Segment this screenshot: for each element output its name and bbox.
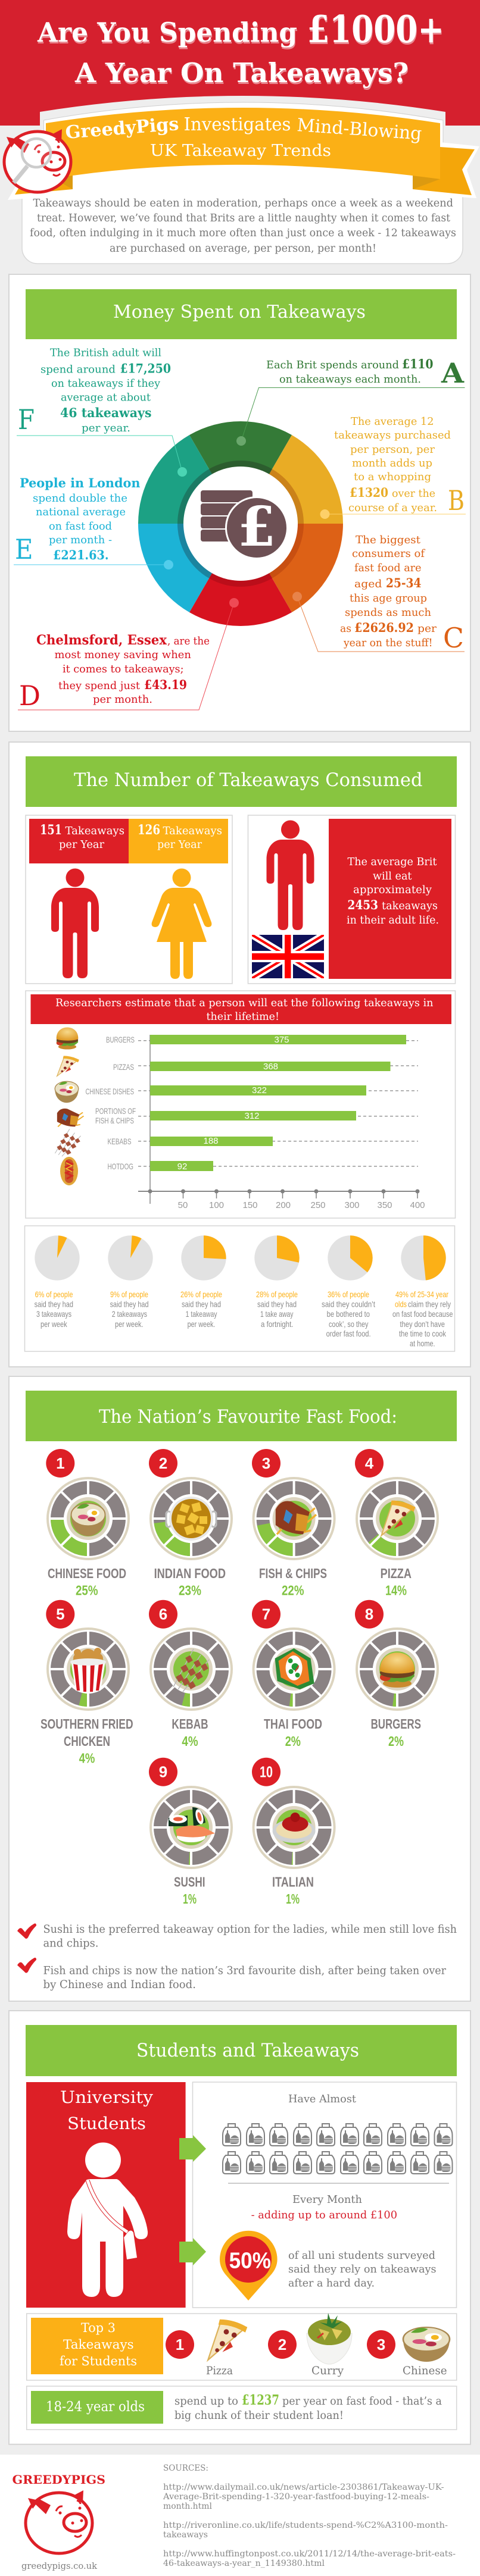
panel: monthly takeaways [193,2082,456,2308]
callout: C: year on the stuff! [343,637,432,649]
item 3: fish and chips: FISH & CHIPS [259,1566,327,1581]
item 10: italian [252,1758,335,1907]
title: A Year On Takeaways? [74,57,409,89]
panel: monthly takeaways: Have Almost [288,2093,357,2105]
item 9: sushi [149,1758,232,1907]
pie captions: said they had [257,1300,297,1309]
icon row: takeaway bags [223,2124,453,2174]
donut chart [138,421,343,626]
item 5: southern fried chicken: CHICKEN [64,1733,110,1749]
pie captions: a fortnight. [261,1319,293,1329]
item 8: burgers [355,1600,438,1749]
category labels [86,1035,136,1171]
sources: http://riveronline.co.uk/life/students-spend-%C2%A3100-month- [163,2521,448,2530]
chart heading: Researchers estimate that a person will eat the following takeaways in [55,997,434,1009]
pie captions: the time to cook [399,1329,447,1338]
university students panel: Students [67,2114,146,2133]
logo: greedypigs.co.uk [21,2561,98,2571]
item 3: fish and chips: 3 [262,1454,270,1472]
intro text: treat. However, we’ve found that Brits are a little naughty when it comes to fast [37,212,450,224]
axis labels: 400 [410,1200,425,1210]
item 1: chinese food: CHINESE FOOD [48,1566,126,1581]
pie captions: said they couldn’t [322,1300,375,1309]
callout: C: 25-34 [386,575,422,590]
stat: women [129,819,228,863]
callout: E [14,475,173,569]
callout: C: The biggest [356,534,421,546]
callout: B: The average 12 [351,415,434,428]
category labels: PIZZAS [113,1062,134,1072]
fact: sushi preference: Sushi is the preferred takeaway option for the ladies, while men still love fish [43,1923,457,1936]
item 9: sushi: SUSHI [174,1874,205,1890]
fact: fish and chips ranking [17,1958,447,1991]
item 4: pizza: PIZZA [381,1566,412,1581]
callout: D: D [19,680,40,712]
item 5: southern fried chicken: 4% [79,1751,95,1766]
stat: men: 151 [40,822,62,838]
callout: B: £1320 [350,485,388,500]
fact: fish and chips ranking: Fish and chips is now the nation’s 3rd favourite dish, after being taken over [43,1964,447,1977]
item 10: italian: 10 [260,1763,273,1781]
category labels: HOTDOG [107,1162,133,1171]
fact: fish and chips ranking: by Chinese and Indian food. [43,1978,196,1991]
sources: takeaways [163,2530,208,2540]
pie captions: 6% of people [35,1289,73,1299]
arrow: to 50 percent [179,2238,206,2265]
callout: F: per year. [82,422,130,434]
sources: month.html [163,2502,213,2511]
item 6: kebab [149,1600,232,1749]
callout: F: on takeaways if they [51,377,161,390]
panel: average brit [248,815,455,984]
sources: SOURCES: [163,2464,208,2473]
callout: D: they spend just [58,680,141,692]
pie captions: 1 takeaway [186,1309,217,1319]
item 9: sushi: 1% [183,1891,197,1907]
panel: monthly takeaways: after a hard day. [288,2277,375,2290]
callout: C: consumers of [352,547,425,560]
pie captions: 28% of people [256,1289,298,1299]
item 8: burgers: 2% [388,1733,404,1749]
icon: pizza [57,1056,79,1076]
stat: lifetime takeaways: 2453 [348,897,378,912]
item 5: southern fried chicken: 5 [56,1605,65,1623]
icon: kebabs [55,1129,81,1156]
icon: man [267,820,314,930]
callout: A [236,356,465,446]
stat: women: 126 [138,822,160,838]
icon: pound coins: £ [238,494,276,559]
choice 2: curry [268,2313,352,2377]
axis labels: 200 [276,1200,291,1210]
callout: C: £2626.92 [354,620,414,635]
panel: monthly takeaways: of all uni students surveyed [288,2249,435,2262]
callout: B: month adds up [352,457,432,469]
logo: GREEDYPIGS [12,2472,105,2487]
icon: chinese bowl [55,1081,79,1103]
panel: 18-24 year olds: big chunk of their student loan! [174,2409,344,2422]
pie captions: 3 takeaways [36,1309,71,1319]
pie captions: 9% of people [110,1289,148,1299]
callout: F: 46 takeaways [60,405,151,420]
pie captions: said they had [110,1300,149,1309]
callout: B: takeaways purchased [334,429,451,442]
callout: E: per month - [49,534,112,546]
axis labels: 150 [242,1200,258,1210]
sources: Average-Brit-spending-1-320-year-fastfood-buying-12-meals- [163,2492,429,2502]
choice 1: pizza [166,2320,247,2377]
callout: E: on fast food [49,520,112,533]
item 7: thai food: 2% [285,1733,301,1749]
callout: D: Chelmsford, Essex [36,633,167,648]
item 9: sushi: 9 [159,1763,167,1781]
callout: E: £221.63. [53,547,108,562]
choice 3: chinese: Chinese [403,2364,447,2377]
ribbon heading [64,114,422,160]
pie captions [35,1289,453,1348]
axis labels: 350 [377,1200,392,1210]
callout: B: per person, per [350,443,435,456]
callout: F: F [18,403,35,436]
item 10: italian: 1% [286,1891,300,1907]
panel: students and takeaways [9,2011,470,2444]
item 4: pizza [355,1449,438,1598]
pie captions: on fast food because [392,1309,453,1319]
heading: favourite food: The Nation’s Favourite Fast Food: [99,1406,397,1428]
item 2: indian food [149,1449,232,1598]
choice 2: curry: Curry [311,2364,344,2377]
bars [150,1035,406,1171]
axis ticks [148,1190,419,1198]
item 6: kebab: KEBAB [172,1716,208,1732]
item 2: indian food: 2 [159,1454,167,1472]
item 6: kebab: 6 [159,1605,167,1623]
category labels: PORTIONS OF [95,1106,136,1116]
panel: 18-24 year olds: spend up to [174,2395,238,2408]
pie captions: they don’t have [400,1319,445,1329]
callout: D: per month. [93,693,152,706]
panel: 18-24 year olds: £1237 [242,2392,279,2408]
ribbon [46,108,440,179]
callout: F [17,346,187,477]
callout: C: spends as much [345,606,431,619]
item 7: thai food [252,1600,335,1749]
header [0,0,480,126]
bar values: 322 [252,1085,267,1095]
callout: C: C [443,622,464,654]
pie captions: order fast food. [326,1329,371,1338]
label: top 3: for Students [60,2354,137,2368]
item 4: pizza: 4 [365,1454,374,1472]
callout: B: to a whopping [354,471,431,483]
panel: number of takeaways consumed [9,742,470,1367]
callout: F: The British adult will [50,346,161,359]
callout: C: fast food are [354,562,422,574]
choice 1: pizza: Pizza [206,2364,233,2377]
icon: pig with magnifier [4,129,71,192]
bar values: 312 [244,1111,260,1121]
item 8: burgers: 8 [365,1605,373,1623]
label: top 3: Takeaways [63,2337,134,2352]
intro text: are purchased on average, per person, per month! [110,243,376,255]
axis labels: 100 [209,1200,224,1210]
panel: monthly takeaways: - adding up to around £100 [251,2209,397,2221]
callout: A: on takeaways each month. [279,373,421,386]
item 2: indian food: INDIAN FOOD [154,1566,226,1581]
panel: 18-24 year olds: 18-24 year olds [46,2399,145,2415]
callout: D: it comes to takeaways; [63,663,183,675]
label: top 3 [31,2318,163,2374]
callout: F: £17,250 [120,361,171,376]
pie captions: per week. [188,1319,215,1329]
bar values: 368 [263,1062,278,1072]
callout: C: as [340,622,351,635]
item 8: burgers: BURGERS [371,1716,421,1732]
item 6: kebab: 4% [182,1733,198,1749]
stat: lifetime takeaways [329,819,451,979]
callout: A: Each Brit spends around [266,359,399,371]
sources: 46-takeaways-a-year_n_1149380.html [163,2559,325,2568]
pie captions: be bothered to [327,1309,370,1319]
item 1: chinese food: 25% [76,1583,98,1598]
bar chart [86,1035,425,1210]
pie captions: said they had [35,1300,73,1309]
pie captions: 49% of 25-34 year [395,1289,448,1299]
icon: man [51,869,99,978]
stat: lifetime takeaways: in their adult life. [347,915,439,927]
callout: A: A [441,357,465,389]
university students panel: University [60,2087,153,2107]
bar values: 188 [203,1136,219,1146]
choice 3: chinese [367,2327,450,2377]
icon: union jack [252,935,324,978]
callout: B [320,415,466,519]
item 1: chinese food [46,1449,129,1598]
item 1: chinese food: 1 [56,1454,65,1472]
item 3: fish and chips [252,1449,335,1598]
stat: women: per Year [157,839,202,851]
callout: B: course of a year. [348,502,437,514]
callout: E: People in London [20,475,141,490]
item 10: italian: ITALIAN [272,1874,314,1890]
stat: lifetime takeaways: The average Brit [348,856,437,868]
panel: lifetime bar chart [26,991,455,1218]
title: £1000+ [307,7,444,51]
callout: E: national average [36,506,126,518]
callout: F: average at about [61,392,151,403]
heading: students [26,2025,457,2076]
heading: favourite food [26,1391,457,1441]
pie captions: claim they rely [408,1300,451,1309]
stat: lifetime takeaways: takeaways [382,900,438,912]
callout: F: spend around [40,363,116,376]
heading: money spent [26,289,457,339]
panel: 18-24 year olds [27,2386,457,2430]
panel: money spent on takeaways [9,274,470,731]
callout: C [292,534,465,654]
ribbon heading: GreedyPigs [64,114,180,143]
choice 2: curry: 2 [278,2336,286,2353]
intro text: food, often indulging in it much more often than just once a week - 12 takeaways [30,227,456,239]
stat: men [29,819,129,863]
intro banner and text card [4,96,479,264]
icon: hotdog [60,1157,78,1185]
panel: frequency pies [25,1226,455,1351]
panel: 18-24 year olds: per year on fast food - that’s a [282,2395,442,2408]
axis labels: 300 [344,1200,360,1210]
category labels: BURGERS [106,1035,135,1044]
fact: sushi preference [17,1923,457,1950]
item 2: indian food: 23% [179,1583,201,1598]
title: Are You Spending [37,17,297,48]
ribbon heading: Investigates [183,114,291,135]
ribbon tails [15,147,475,195]
pie captions: 36% of people [328,1289,369,1299]
sources: http://www.dailymail.co.uk/news/article-2303861/Takeaway-UK- [163,2483,444,2492]
callout: D [18,598,239,712]
icon: burger [57,1028,78,1050]
logo [12,2472,105,2571]
icon: pound coins [201,490,288,559]
callout: C: aged [354,578,382,590]
footer [0,2455,480,2576]
chart heading: their lifetime! [206,1010,279,1023]
item 5: southern fried chicken: SOUTHERN FRIED [40,1716,133,1732]
sources: http://www.huffingtonpost.co.uk/2011/12/14/the-average-brit-eats- [163,2549,456,2559]
arrow: to bags [179,2135,206,2162]
ribbon heading: UK Takeaway Trends [150,142,331,160]
callout: C: this age group [350,592,427,605]
stat: women: Takeaways [163,825,222,837]
sources [163,2464,456,2568]
stat: men: per Year [59,839,105,851]
pie captions: per week [40,1319,67,1329]
heading: students: Students and Takeaways [136,2040,359,2061]
item 4: pizza: 14% [385,1583,407,1598]
item 7: thai food: THAI FOOD [264,1716,322,1732]
callout: E: spend double the [33,492,127,505]
pie captions: 26% of people [180,1289,222,1299]
pie captions: olds [395,1300,407,1309]
heading: money spent: Money Spent on Takeaways [113,302,366,323]
category labels: KEBABS [107,1137,131,1146]
callout: E: E [15,533,33,565]
heading: number consumed: The Number of Takeaways Consumed [74,769,423,791]
icon: 50 percent pin: 50% [229,2249,271,2274]
pie captions: 1 take away [260,1309,293,1319]
choice 1: pizza: 1 [176,2336,184,2353]
bar values: 375 [274,1035,289,1045]
intro text: Takeaways should be eaten in moderation, perhaps once a week as a weekend [33,198,453,209]
chart heading [31,994,451,1024]
panel: monthly takeaways: said they rely on takeaways [288,2263,437,2275]
fact: sushi preference: and chips. [43,1937,99,1950]
axis labels: 250 [310,1200,326,1210]
ribbon heading: Mind-Blowing [296,115,422,145]
axis labels: 50 [178,1200,188,1210]
icon: fish and chips [57,1109,83,1126]
callout: D: £43.19 [144,677,187,692]
callout: B: over the [392,487,435,500]
panel: men vs women [26,815,232,984]
callout: C: per [417,622,437,635]
icon: student [67,2142,148,2297]
panel: top 3 takeaways [27,2313,457,2380]
callout: B: B [448,484,465,517]
callout: D: , are the [167,635,210,647]
panel: nation's favourite fast food [9,1376,470,2001]
pie charts [35,1235,446,1281]
icon: woman [152,869,211,979]
pie captions: said they had [182,1300,221,1309]
stat: men: Takeaways [66,825,124,837]
pie captions: 2 takeaways [112,1309,147,1319]
item 7: thai food: 7 [262,1605,270,1623]
heading: number consumed [26,756,457,807]
title [37,7,444,89]
pie captions: at home. [410,1339,435,1348]
pie captions: cook’, so they [329,1319,368,1329]
stat: lifetime takeaways: approximately [353,884,432,896]
item 5: southern fried chicken [40,1600,133,1766]
panel: monthly takeaways: Every Month [292,2193,362,2206]
bar values: 92 [177,1162,187,1172]
pie captions: per week. [115,1319,144,1329]
category labels: CHINESE DISHES [86,1087,134,1096]
label: top 3: Top 3 [81,2321,116,2335]
item 3: fish and chips: 22% [282,1583,304,1598]
category labels: FISH & CHIPS [95,1116,134,1125]
choice 3: chinese: 3 [377,2336,385,2353]
axis labels [178,1200,425,1210]
callout: A: £110 [402,356,434,371]
icon: 50 percent pin [220,2231,278,2300]
university students panel [26,2082,186,2308]
bar values [177,1035,289,1172]
callout: D: most money saving when [55,649,191,661]
intro text [30,198,456,255]
stat: lifetime takeaways: will eat [373,871,412,882]
